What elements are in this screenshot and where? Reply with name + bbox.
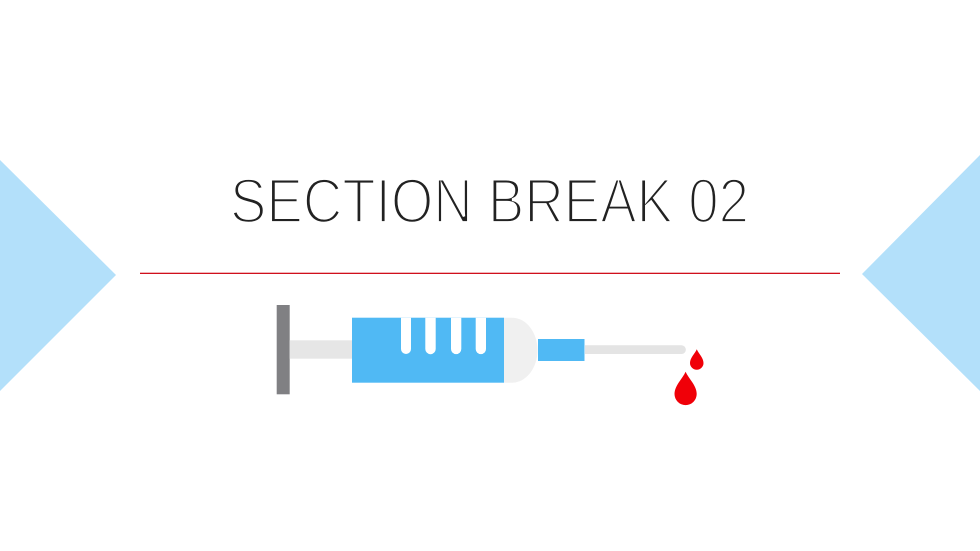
- left triangle: [0, 160, 116, 391]
- barrel: [352, 318, 504, 383]
- divider line: [140, 273, 840, 274]
- title: SECTION BREAK 02: [230, 166, 749, 236]
- plunger handle: [277, 305, 290, 394]
- icon: syringe: [277, 305, 686, 394]
- measure marks: [401, 318, 486, 354]
- nozzle: [538, 339, 584, 361]
- plunger rod: [290, 340, 353, 359]
- right triangle: [862, 155, 980, 391]
- needle: [585, 345, 686, 354]
- icon: small blood drop: [690, 349, 704, 370]
- syringe tip cap: [504, 318, 538, 383]
- icon: large blood drop: [674, 372, 697, 405]
